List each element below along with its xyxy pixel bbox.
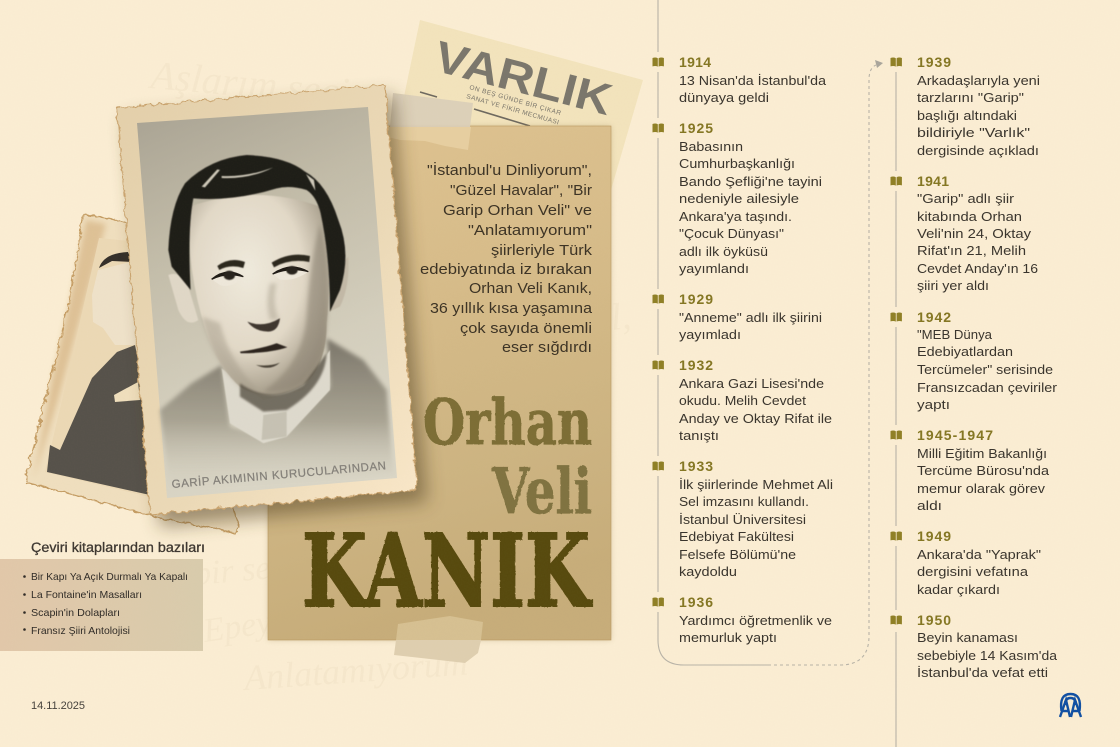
date: 14.11.2025 <box>31 700 85 712</box>
1942 entry <box>890 309 1058 412</box>
translated books panel: Bir Kapı Ya Açık Durmalı Ya Kapalı <box>31 571 188 583</box>
icon: book <box>652 462 664 471</box>
icon: book <box>890 177 902 186</box>
intro text: eser sığdırdı <box>502 340 592 356</box>
1942 entry: "MEB Dünya <box>917 327 993 342</box>
1933 entry: Edebiyat Fakültesi <box>679 529 794 544</box>
1942 entry: Edebiyatlardan <box>917 344 1013 359</box>
shadow of main photograph <box>126 95 427 527</box>
1925 entry: "Çocuk Dünyası" <box>679 226 784 241</box>
1941 entry: kitabında Orhan <box>917 209 1022 224</box>
portrait of Orhan Veli <box>160 155 393 490</box>
intro text: 36 yıllık kısa yaşamına <box>430 301 593 317</box>
back photograph <box>25 214 240 532</box>
translated books panel <box>0 559 203 651</box>
tan paper panel <box>268 126 611 640</box>
1945-1947 entry: 1945-1947 <box>917 427 993 443</box>
1933 entry: Felsefe Bölümü'ne <box>679 547 796 562</box>
1945-1947 entry <box>890 427 1050 513</box>
1936 entry: memurluk yaptı <box>679 630 777 645</box>
1950 entry: 1950 <box>917 612 951 628</box>
1933 entry: 1933 <box>679 458 713 474</box>
man in suit <box>47 252 150 495</box>
icon: book <box>890 431 902 440</box>
1945-1947 entry: Milli Eğitim Bakanlığı <box>917 446 1047 461</box>
icon: book <box>652 124 664 133</box>
intro text: Orhan Veli Kanık, <box>469 281 592 297</box>
1942 entry: yaptı <box>917 397 950 412</box>
1933 entry: İlk şiirlerinde Mehmet Ali <box>679 477 833 492</box>
1939 entry: tarzlarını "Garip" <box>917 90 1024 105</box>
1929 entry <box>652 291 822 342</box>
intro text: "İstanbul'u Dinliyorum", <box>427 161 592 179</box>
1936 entry: Yardımcı öğretmenlik ve <box>679 613 832 628</box>
1925 entry: nedeniyle ailesiyle <box>679 191 799 206</box>
1939 entry: başlığı altındaki <box>917 108 1017 123</box>
faint handwriting background <box>146 52 633 698</box>
tape top <box>388 93 473 150</box>
1941 entry: 1941 <box>917 173 949 189</box>
back photo picture <box>45 238 150 497</box>
photo picture <box>137 107 397 498</box>
1932 entry: 1932 <box>679 357 713 373</box>
intro text: "Güzel Havalar", "Bir <box>450 183 592 199</box>
1925 entry: adlı ilk öyküsü <box>679 244 768 259</box>
icon: book <box>652 58 664 67</box>
1929 entry: yayımladı <box>679 327 741 342</box>
faint handwriting background: Epeyce <box>200 600 303 650</box>
intro text: çok sayıda önemli <box>460 321 592 337</box>
1949 entry: Ankara'da "Yaprak" <box>917 547 1041 562</box>
1925 entry: yayımlandı <box>679 261 749 276</box>
1941 entry: Cevdet Anday'ın 16 <box>917 261 1038 276</box>
magazine subtitle: ON BEŞ GÜNDE BİR ÇIKAR <box>468 82 563 117</box>
icon: book <box>890 532 902 541</box>
1936 entry <box>652 594 832 645</box>
1933 entry: Sel imzasını kullandı. <box>679 494 809 509</box>
1933 entry <box>652 458 833 579</box>
1949 entry: dergisini vefatına <box>917 564 1029 579</box>
1933 entry: kaydoldu <box>679 564 737 579</box>
1950 entry: İstanbul'da vefat etti <box>917 665 1048 680</box>
1925 entry: Bando Şefliği'ne tayini <box>679 174 822 189</box>
icon: book <box>890 58 902 67</box>
1914 entry: dünyaya geldi <box>679 90 769 105</box>
1929 entry: "Anneme" adlı ilk şiirini <box>679 310 822 325</box>
icon: book <box>652 361 664 370</box>
timeline connector: right column <box>895 72 897 747</box>
intro text: edebiyatında iz bırakan <box>420 262 592 278</box>
translated books heading: Çeviri kitaplarından bazıları <box>31 540 205 555</box>
1941 entry <box>890 173 1038 293</box>
main photograph <box>117 85 417 515</box>
title: Orhan Veli Kanık: Veli <box>491 454 592 528</box>
1932 entry: okudu. Melih Cevdet <box>679 393 806 408</box>
1936 entry: 1936 <box>679 594 713 610</box>
1942 entry: Fransızcadan çeviriler <box>917 380 1058 395</box>
intro text: Garip Orhan Veli" ve <box>443 203 592 219</box>
1932 entry: Anday ve Oktay Rifat ile <box>679 411 832 426</box>
1950 entry: Beyin kanaması <box>917 630 1018 645</box>
photo caption: GARİP AKIMININ KURUCULARINDAN <box>171 459 386 491</box>
translated books panel: Fransız Şiiri Antolojisi <box>31 625 130 637</box>
magazine: Varlık cover <box>398 20 643 190</box>
faint handwriting background: Anlatamıyorum <box>241 642 469 698</box>
title: Orhan Veli Kanık <box>302 385 592 630</box>
timeline connector: left column <box>658 0 876 665</box>
1945-1947 entry: Tercüme Bürosu'nda <box>917 463 1050 478</box>
1939 entry: Arkadaşlarıyla yeni <box>917 73 1040 88</box>
1941 entry: şiiri yer aldı <box>917 278 989 293</box>
1925 entry: Cumhurbaşkanlığı <box>679 156 795 171</box>
1933 entry: İstanbul Üniversitesi <box>679 512 806 527</box>
faint handwriting background: l, <box>609 295 633 339</box>
1949 entry <box>890 528 1041 597</box>
1932 entry: tanıştı <box>679 428 719 443</box>
1942 entry: Tercümeler" serisinde <box>917 362 1053 377</box>
intro text: şiirleriyle Türk <box>491 243 593 259</box>
1929 entry: 1929 <box>679 291 713 307</box>
intro text: "Anlatamıyorum" <box>468 223 592 239</box>
icon: book <box>652 295 664 304</box>
icon: book <box>652 598 664 607</box>
1941 entry: Rifat'ın 21, Melih <box>917 243 1026 258</box>
title: Orhan Veli Kanık: KANIK <box>302 512 592 630</box>
AA logo <box>1060 694 1081 717</box>
1945-1947 entry: memur olarak görev <box>917 481 1046 496</box>
1914 entry <box>652 54 827 105</box>
1914 entry: 1914 <box>679 54 711 70</box>
translated books panel: La Fontaine'in Masalları <box>31 589 142 601</box>
timeline arrowhead <box>875 60 883 68</box>
1939 entry: dergisinde açıkladı <box>917 143 1039 158</box>
intro text <box>420 161 593 356</box>
1949 entry: 1949 <box>917 528 951 544</box>
1914 entry: 13 Nisan'da İstanbul'da <box>679 73 827 88</box>
1945-1947 entry: aldı <box>917 498 942 513</box>
1949 entry: kadar çıkardı <box>917 582 1000 597</box>
faint handwriting background: Aşlarım şeçin <box>146 52 371 116</box>
1941 entry: "Garip" adlı şiir <box>917 191 1015 206</box>
icon: book <box>890 616 902 625</box>
faint handwriting background: bir sen <box>192 548 289 593</box>
magazine subtitle: SANAT VE FİKİR MECMUASI <box>465 91 560 126</box>
tape bottom <box>394 616 483 663</box>
1932 entry: Ankara Gazi Lisesi'nde <box>679 376 824 391</box>
icon: book <box>890 313 902 322</box>
1942 entry: 1942 <box>917 309 951 325</box>
1932 entry <box>652 357 832 443</box>
1925 entry <box>652 120 822 276</box>
1950 entry: sebebiyle 14 Kasım'da <box>917 648 1058 663</box>
1939 entry: 1939 <box>917 54 951 70</box>
1950 entry <box>890 612 1058 680</box>
1925 entry: Ankara'ya taşındı. <box>679 209 792 224</box>
1941 entry: Veli'nin 24, Oktay <box>917 226 1032 241</box>
1925 entry: 1925 <box>679 120 713 136</box>
1939 entry: bildiriyle "Varlık" <box>917 125 1030 140</box>
translated books panel: Scapin'in Dolapları <box>31 607 120 619</box>
1939 entry <box>890 54 1040 158</box>
title: Orhan Veli Kanık: Orhan <box>423 385 592 459</box>
magazine title: VARLIK <box>429 32 617 125</box>
1925 entry: Babasının <box>679 139 743 154</box>
